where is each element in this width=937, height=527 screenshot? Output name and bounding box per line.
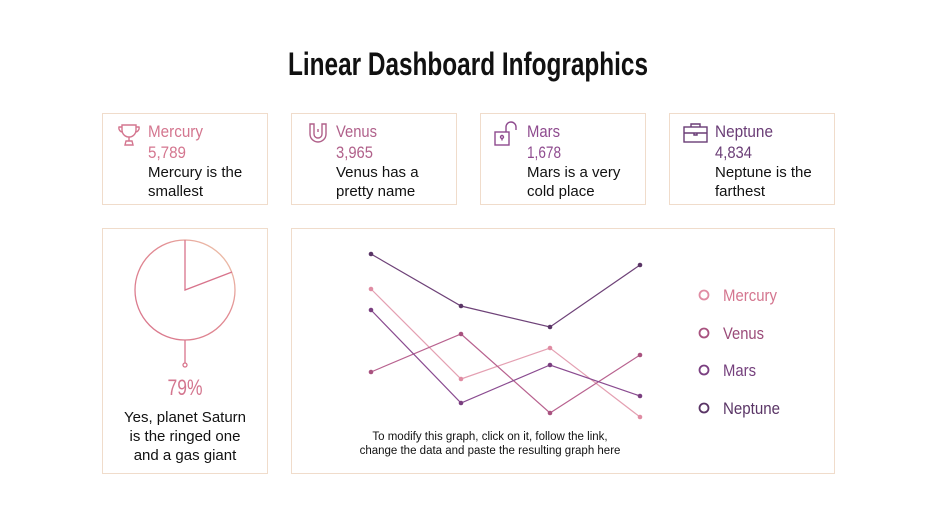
card: Mercury <box>102 114 268 204</box>
card: Venus <box>292 114 456 204</box>
panel: pie <box>102 228 268 474</box>
card: Neptune: Neptune is the <box>715 164 812 181</box>
card: Neptune: 4,834 <box>715 143 752 162</box>
title: Linear Dashboard Infographics <box>288 46 648 82</box>
text: saturn: Yes, planet Saturn <box>124 409 246 426</box>
card: Mercury: 5,789 <box>148 143 186 162</box>
card: Neptune <box>670 114 834 204</box>
text: Neptune: Neptune <box>715 122 773 141</box>
panel: pie: is the ringed one <box>130 428 240 445</box>
card: Venus: pretty name <box>336 183 415 200</box>
percentage: 79% <box>168 375 202 400</box>
legend: Neptune <box>723 399 780 418</box>
card: Venus: 3,965 <box>336 143 373 162</box>
panel: line chart <box>292 228 834 474</box>
panel: pie: and a gas giant <box>134 447 237 464</box>
pie chart <box>135 240 235 367</box>
card: Mars: Mars is a very <box>527 164 621 181</box>
text: Mars: Mars <box>527 122 560 141</box>
card: Mars: cold place <box>527 183 595 200</box>
text: Mercury: Mercury <box>148 122 203 141</box>
icon: briefcase <box>684 124 707 142</box>
card: Venus: Venus has a <box>336 164 419 181</box>
card: Neptune: farthest <box>715 183 766 200</box>
icon: trophy <box>119 125 139 145</box>
legend: Mercury <box>723 286 777 305</box>
legend: Venus <box>723 324 764 343</box>
icon: unlocked padlock <box>495 122 516 145</box>
icon: magnet <box>310 124 326 142</box>
legend <box>700 286 780 418</box>
text: Venus: Venus <box>336 122 377 141</box>
card: Mercury: Mercury is the <box>148 164 242 181</box>
card: Mars: 1,678 <box>527 143 561 162</box>
caption: To modify this graph, click on it, follow the link, <box>372 431 608 443</box>
line chart <box>371 254 640 417</box>
card: Mercury: smallest <box>148 183 204 200</box>
card: Mars <box>480 114 646 204</box>
legend: Mars <box>723 361 756 380</box>
panel: line chart: change the data and paste the resulting graph here <box>360 445 620 457</box>
